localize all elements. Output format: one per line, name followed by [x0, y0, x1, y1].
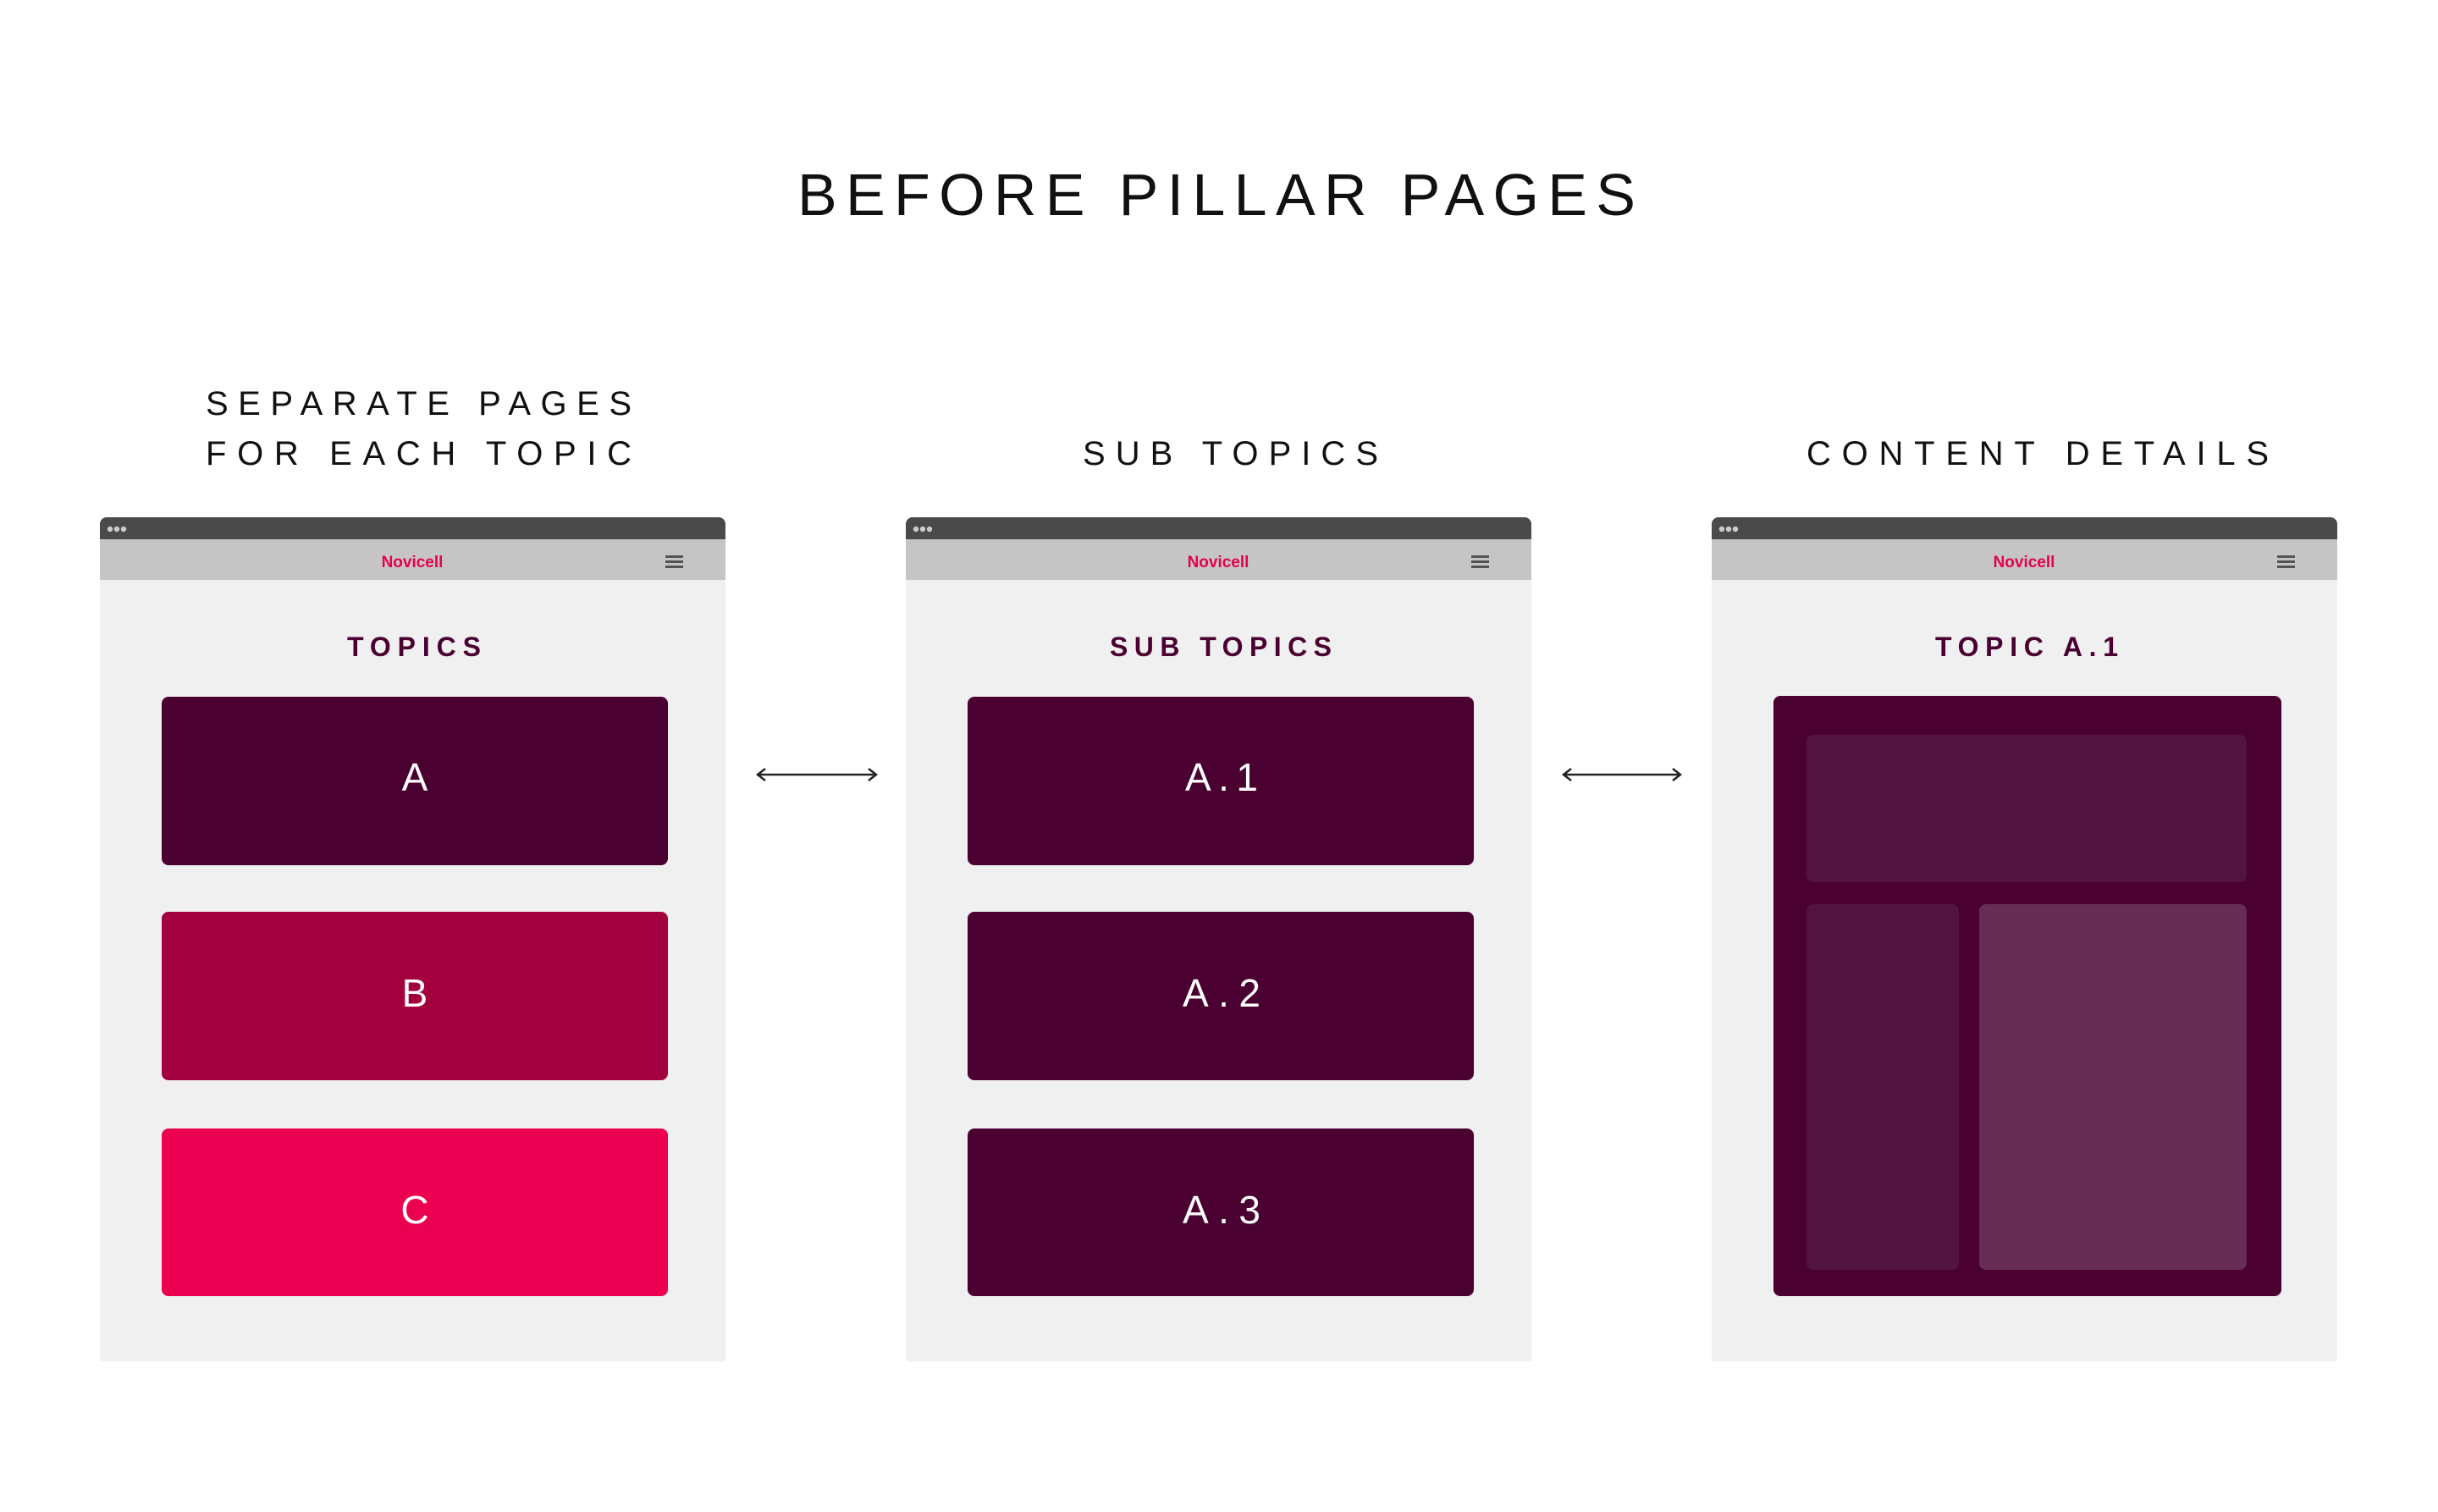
panel: sub topics: [906, 517, 1531, 1361]
box A: A: [402, 755, 428, 799]
box B: [162, 912, 668, 1080]
box C: C: [400, 1188, 429, 1232]
title: BEFORE PILLAR PAGES: [797, 162, 1635, 228]
heading: sub topics: SUB TOPICS: [1083, 435, 1378, 472]
heading: content details: CONTENT DETAILS: [1806, 435, 2269, 472]
box A: [162, 697, 668, 865]
heading: separate pages: SEPARATE PAGES: [206, 385, 632, 422]
logo: Novicell: [1994, 554, 2055, 571]
panel heading: SUB TOPICS: [1110, 632, 1332, 662]
box A.2: A.2: [1183, 971, 1260, 1015]
logo: Novicell: [1188, 554, 1249, 571]
logo: Novicell: [382, 554, 443, 571]
arrow 1: [758, 769, 876, 781]
content layout box: [1773, 696, 2281, 1296]
box A.1: A.1: [1185, 755, 1258, 799]
heading: separate pages: [206, 385, 632, 472]
box A.3: A.3: [1183, 1188, 1260, 1232]
box A.3: [968, 1128, 1474, 1296]
panel heading: TOPIC A.1: [1935, 632, 2118, 662]
panel heading: TOPICS: [347, 632, 481, 662]
box B: B: [402, 971, 427, 1015]
box A.2: [968, 912, 1474, 1080]
arrow 2: [1564, 769, 1680, 781]
panel: content details: [1712, 517, 2337, 1361]
box C: [162, 1128, 668, 1296]
icon: menu: [2277, 555, 2295, 568]
icon: menu: [665, 555, 683, 568]
panel: topics: [100, 517, 725, 1361]
icon: menu: [1471, 555, 1489, 568]
box A.1: [968, 697, 1474, 865]
heading: separate pages: FOR EACH TOPIC: [206, 435, 632, 472]
